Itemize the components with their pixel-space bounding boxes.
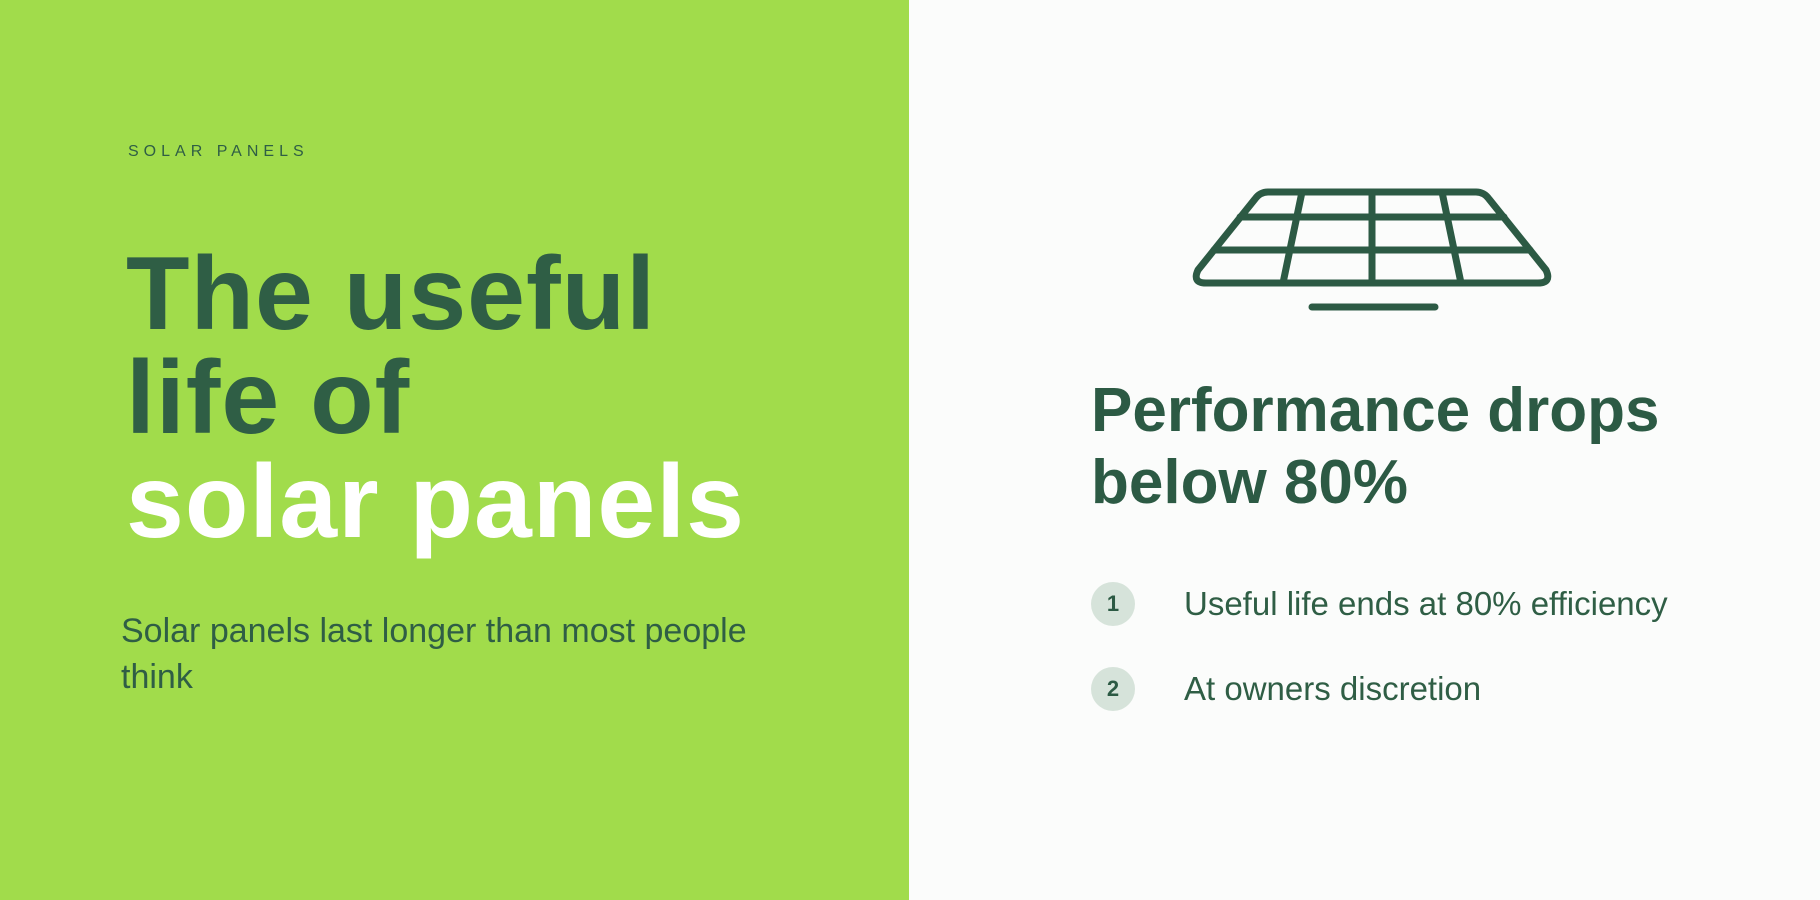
list item 2: At owners discretion [1184, 670, 1481, 707]
icon: solar panel [1192, 188, 1552, 310]
heading [1091, 376, 1660, 517]
heading: below 80% [1091, 448, 1408, 517]
title [126, 236, 745, 560]
heading: Performance drops [1091, 376, 1660, 445]
list item 2 [1091, 667, 1481, 711]
panel: left green [0, 0, 909, 900]
title: life of [126, 340, 410, 456]
title: The useful [126, 236, 656, 352]
subtitle: Solar panels last longer than most people think [121, 612, 747, 696]
title: solar panels [126, 444, 745, 560]
list item 1: 1 [1107, 591, 1119, 616]
list item 1: Useful life ends at 80% efficiency [1184, 585, 1668, 622]
list item 2: 2 [1107, 676, 1119, 701]
eyebrow label: SOLAR PANELS [128, 143, 309, 160]
